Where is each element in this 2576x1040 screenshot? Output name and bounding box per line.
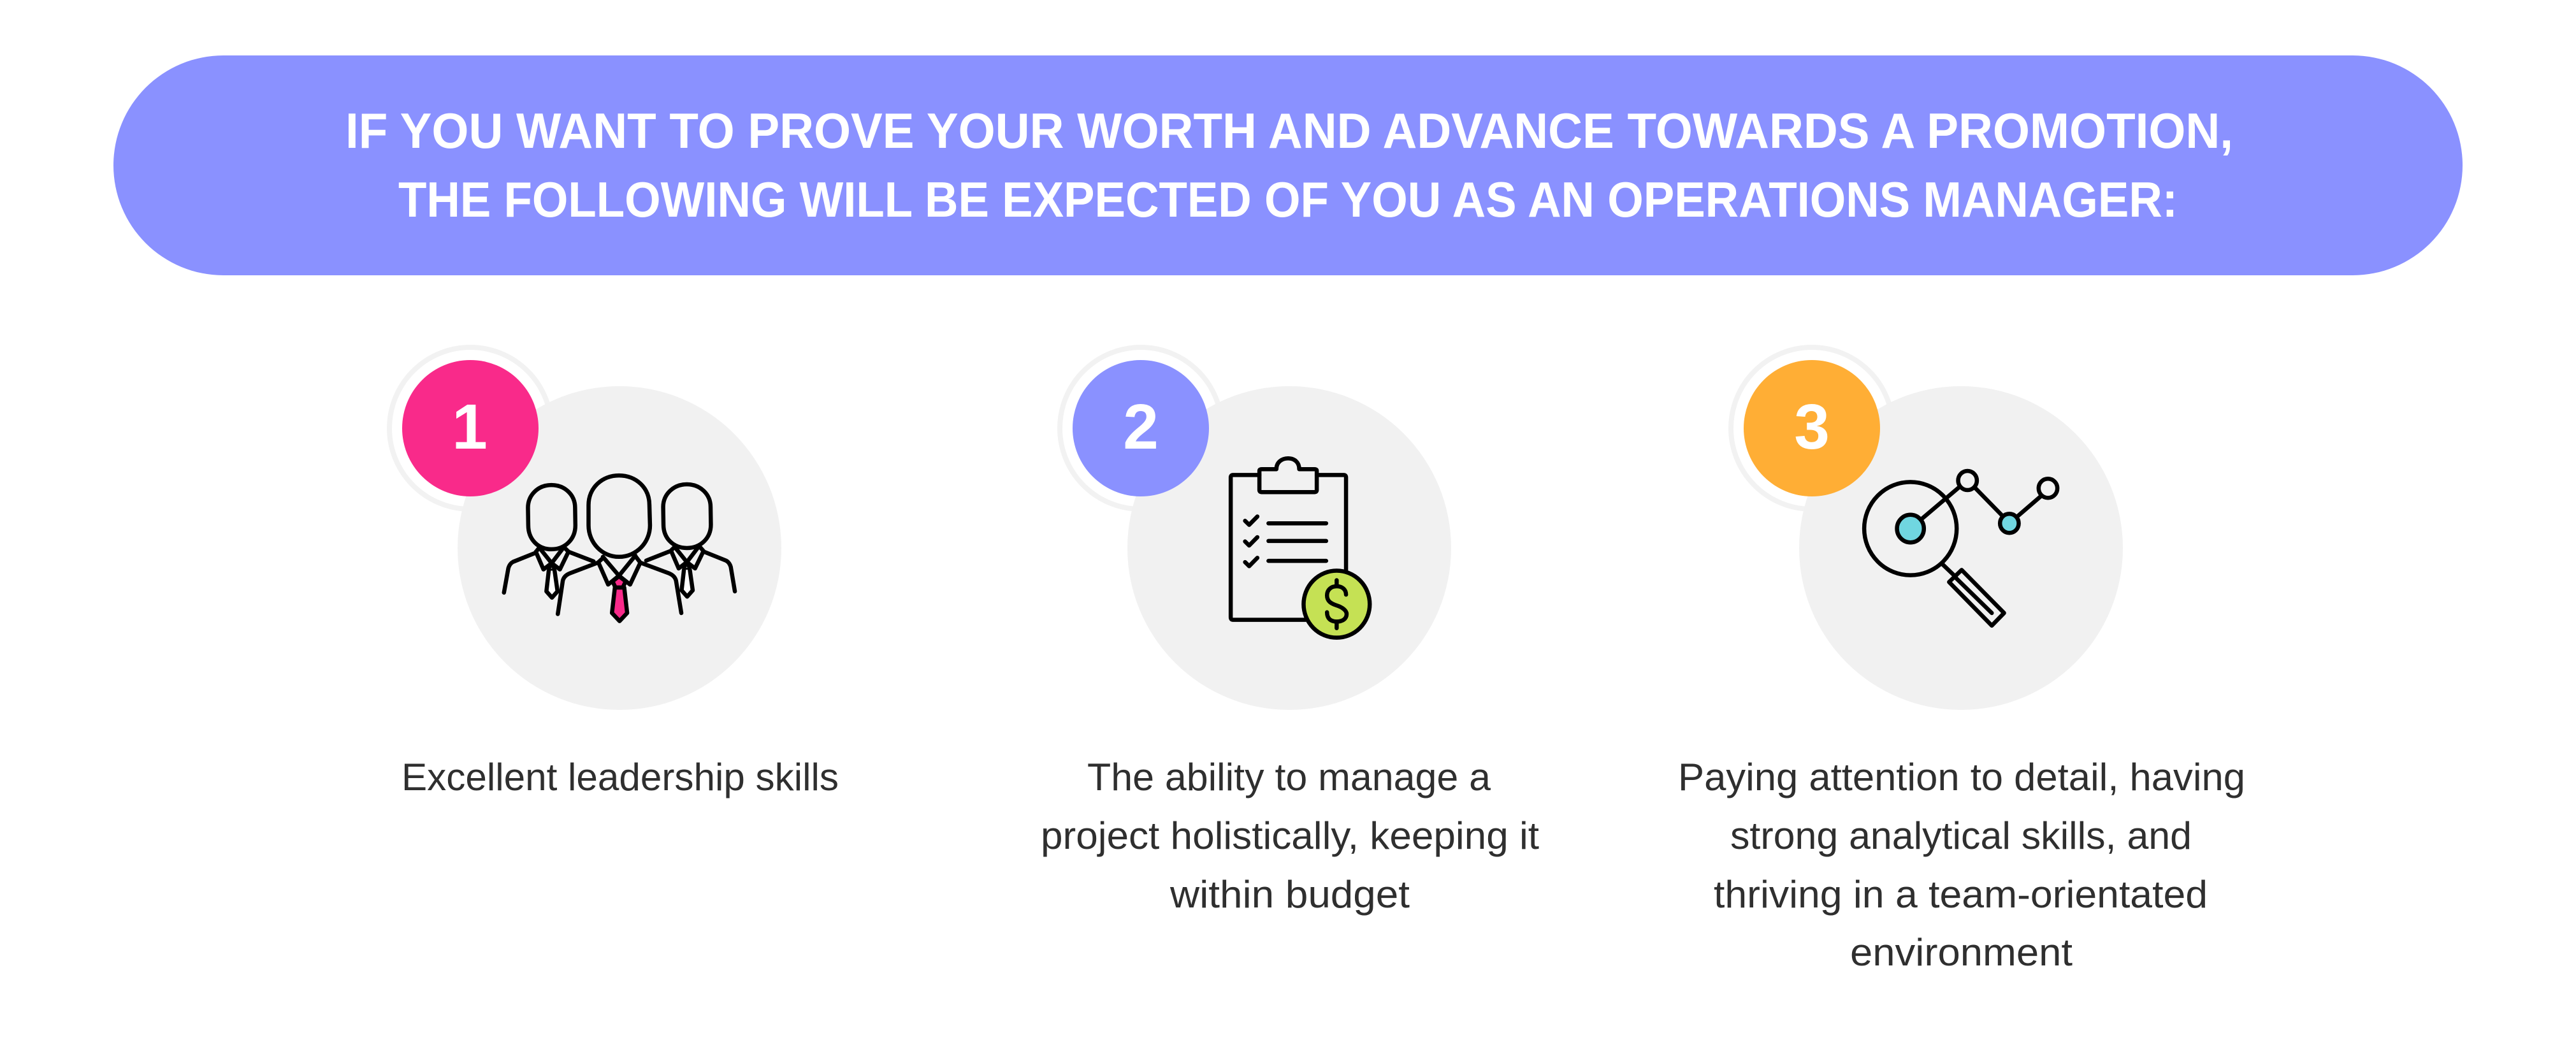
number badge 3: 3 <box>1794 391 1830 463</box>
item 3 text: strong analytical skills, and <box>1730 814 2192 857</box>
badge ring 1 <box>389 347 551 509</box>
item 1 text: Excellent leadership skills <box>402 756 839 798</box>
item 3 text: Paying attention to detail, having <box>1678 756 2245 798</box>
background circle 2 <box>1127 386 1451 710</box>
icon: magnifier over line chart <box>1864 471 2057 626</box>
header banner <box>113 55 2463 275</box>
panel: item 2 budget <box>1041 347 1539 916</box>
number badge 2: 2 <box>1123 391 1159 463</box>
number badge 1: 1 <box>452 391 488 463</box>
banner heading text: IF YOU WANT TO PROVE YOUR WORTH AND ADVANCE TOWARDS A PROMOTION, <box>345 103 2233 159</box>
badge ring 3 <box>1731 347 1893 509</box>
number badge 2 <box>1073 360 1209 496</box>
panel: item 1 leadership <box>389 347 839 798</box>
item 2 text: The ability to manage a <box>1087 756 1491 798</box>
item 2 text: within budget <box>1169 873 1410 916</box>
icon: three business people <box>504 475 735 621</box>
number badge 3 <box>1744 360 1880 496</box>
icon: clipboard with dollar coin <box>1231 458 1370 638</box>
panel: item 3 analytics <box>1678 347 2245 974</box>
number badge 1 <box>402 360 539 496</box>
item 3 text: environment <box>1850 931 2073 974</box>
banner heading text: THE FOLLOWING WILL BE EXPECTED OF YOU AS AN OPERATIONS MANAGER: <box>398 171 2178 227</box>
badge ring 2 <box>1060 347 1222 509</box>
item 2 text: project holistically, keeping it <box>1041 814 1539 857</box>
background circle 1 <box>458 386 781 710</box>
banner heading text <box>345 103 2233 227</box>
item 3 text: thriving in a team-orientated <box>1714 873 2208 916</box>
item 3 text <box>1678 756 2245 974</box>
background circle 3 <box>1799 386 2123 710</box>
item 2 text <box>1041 756 1539 916</box>
